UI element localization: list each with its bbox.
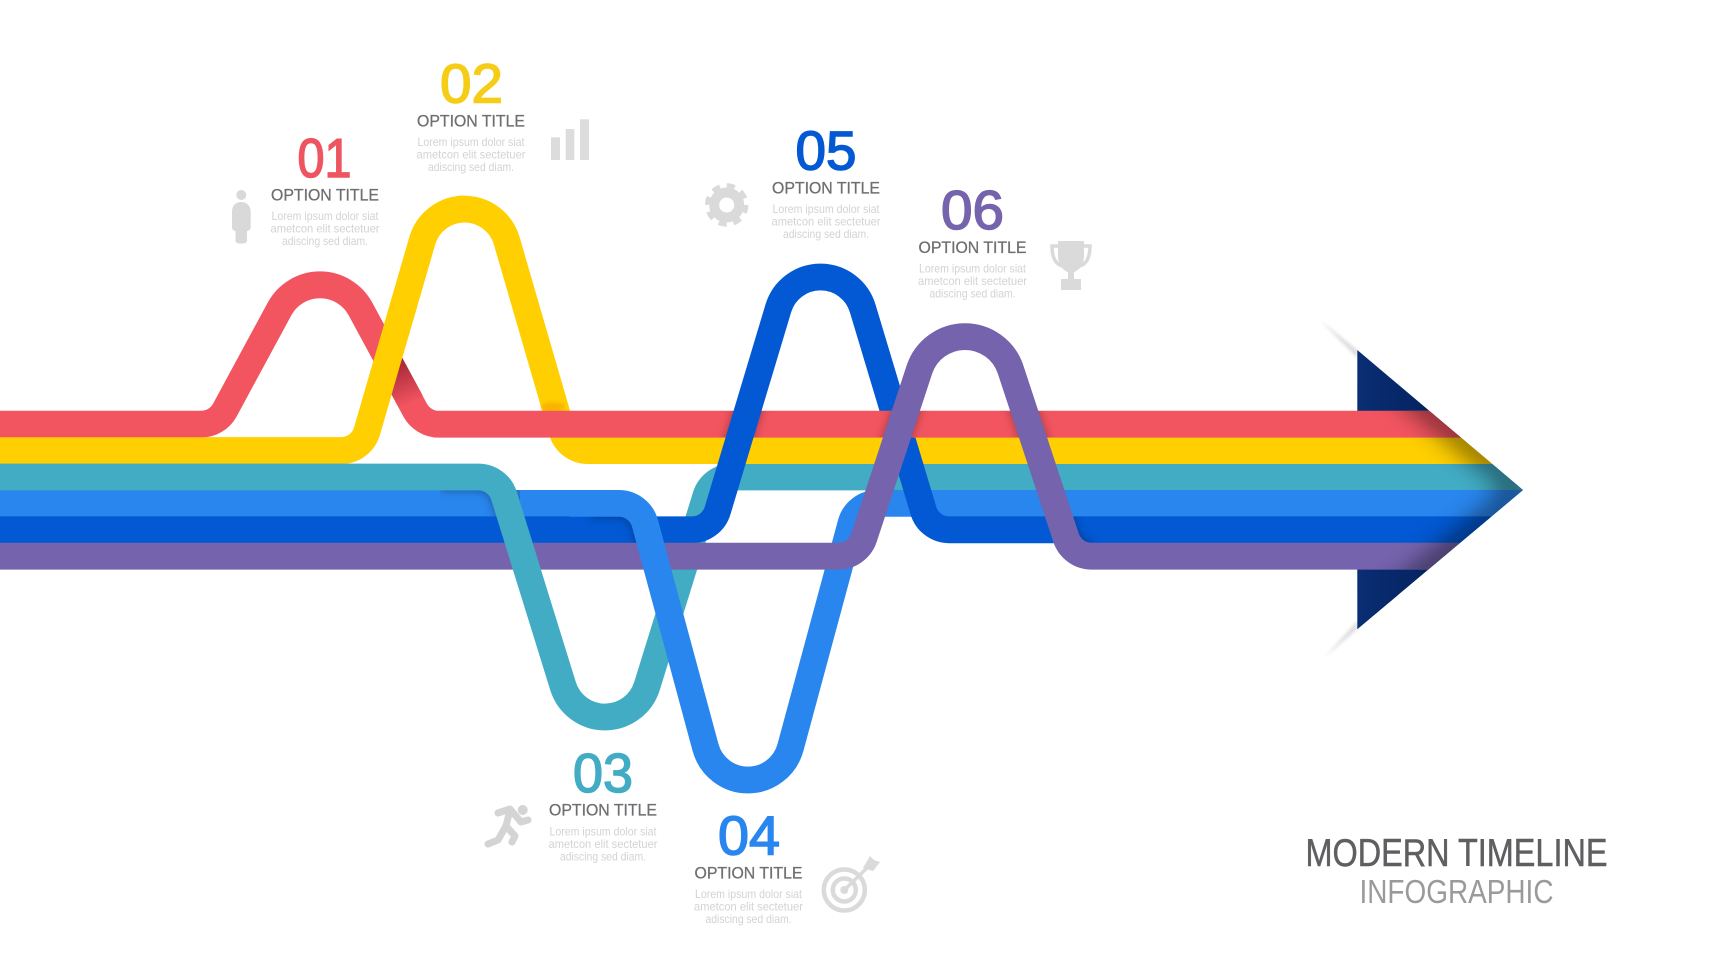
option 03 block	[488, 742, 658, 863]
ribbon 01 red path	[0, 285, 1540, 424]
title line: infographic: INFOGRAPHIC	[1360, 873, 1554, 910]
ribbon 05 dark blue falling section	[820, 277, 1540, 530]
option 05 block	[708, 120, 880, 241]
icon: runner	[488, 807, 528, 844]
title 02: OPTION TITLE	[417, 112, 525, 130]
description 04: Lorem ipsum dolor siat	[695, 887, 803, 901]
number 03: 03	[573, 742, 633, 804]
ribbon 04 light blue rising section	[748, 503, 1540, 780]
description 05: adiscing sed diam.	[783, 227, 869, 241]
rainbow ribbons	[0, 209, 1540, 780]
shadow of purple on bands	[877, 411, 1053, 438]
ribbon 06 purple path	[0, 337, 1540, 556]
ribbon 02 yellow rising section over red	[0, 209, 464, 451]
arrow tip shading	[1386, 411, 1523, 570]
ribbon 03 teal falling section	[0, 477, 606, 717]
shadow of dark blue on red	[720, 411, 768, 438]
description 01: Lorem ipsum dolor siat	[272, 209, 379, 223]
arrow fold shadows	[1320, 320, 1357, 657]
ribbon 02 yellow full path	[0, 209, 1540, 451]
shadow of light blue bend on dark blue	[587, 516, 636, 543]
title line: modern timeline: MODERN TIMELINE	[1306, 832, 1608, 875]
description 04: adiscing sed diam.	[706, 912, 792, 926]
description 02: ametcon elit sectetuer	[416, 148, 526, 162]
description 03: Lorem ipsum dolor siat	[550, 824, 657, 838]
red shade under yellow leg	[385, 354, 411, 402]
icon: gear	[708, 186, 746, 224]
description 03	[548, 824, 658, 863]
description 06: ametcon elit sectetuer	[918, 274, 1027, 288]
description 05: ametcon elit sectetuer	[772, 214, 880, 228]
shadow of teal bend on blue	[440, 490, 520, 516]
description 04	[694, 887, 803, 926]
title 03: OPTION TITLE	[549, 801, 657, 820]
option 01 block	[232, 127, 380, 248]
main title	[1306, 832, 1608, 910]
description 06: adiscing sed diam.	[930, 286, 1016, 300]
description 01	[270, 209, 380, 248]
number 02: 02	[440, 52, 503, 114]
description 05	[772, 202, 880, 241]
description 01: adiscing sed diam.	[282, 234, 368, 248]
description 02: adiscing sed diam.	[428, 160, 514, 174]
option 04 block	[694, 804, 880, 926]
title 05: OPTION TITLE	[772, 178, 880, 198]
icon: target	[824, 856, 880, 910]
yellow shadow under red	[541, 402, 565, 412]
description 01: ametcon elit sectetuer	[270, 222, 380, 236]
title 06: OPTION TITLE	[918, 238, 1026, 257]
description 03: adiscing sed diam.	[560, 849, 646, 863]
number 04: 04	[718, 804, 780, 866]
description 04: ametcon elit sectetuer	[694, 900, 803, 914]
option 06 block	[918, 179, 1090, 300]
number 05: 05	[796, 120, 856, 182]
description 03: ametcon elit sectetuer	[548, 837, 658, 851]
description 02	[416, 135, 526, 174]
title 04: OPTION TITLE	[694, 864, 802, 882]
icon: trophy	[1052, 241, 1090, 290]
icon: bar chart	[551, 119, 589, 160]
number 06: 06	[941, 179, 1004, 241]
ribbon 04 light blue left flat	[0, 490, 570, 517]
ribbon 03 teal rising section	[605, 477, 1540, 717]
description 02: Lorem ipsum dolor siat	[418, 135, 525, 149]
arrow head navy back	[1357, 350, 1523, 629]
description 06	[918, 261, 1027, 300]
ribbon 05 dark blue rising section	[0, 277, 821, 530]
icon: person	[232, 190, 251, 244]
description 05: Lorem ipsum dolor siat	[772, 202, 880, 216]
title 01: OPTION TITLE	[271, 186, 379, 204]
number 01: 01	[298, 127, 352, 189]
description 06: Lorem ipsum dolor siat	[919, 261, 1027, 275]
ribbon 04 light blue falling section	[570, 503, 749, 780]
option 02 block	[416, 52, 589, 174]
